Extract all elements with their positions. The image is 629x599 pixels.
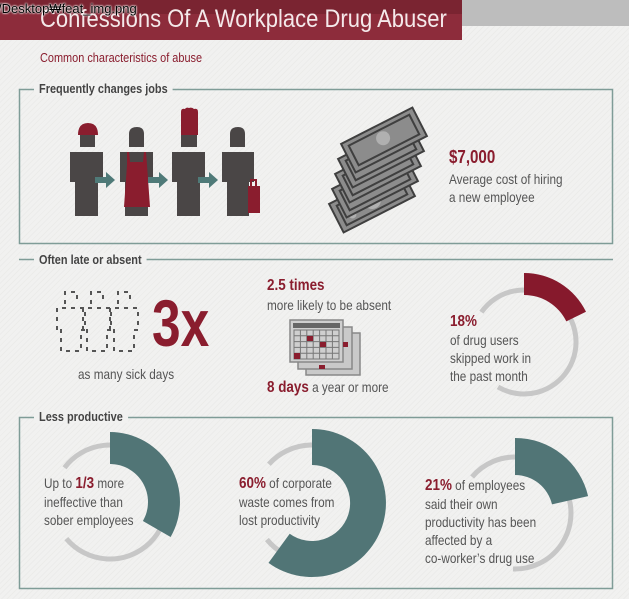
- text: hiring cost: Average cost of hiring: [449, 171, 563, 187]
- text: 60%: [239, 475, 334, 528]
- text: 18%: of drug users: [450, 332, 519, 348]
- figure 3 with chef hat: [172, 108, 205, 216]
- icon: dashed sick people: [57, 292, 138, 351]
- text: 21%: 21% of employees: [425, 477, 525, 494]
- chart: 21% donut: [472, 438, 588, 569]
- text: 60%: lost productivity: [239, 512, 320, 528]
- chart: 60% donut: [267, 429, 386, 577]
- text: hiring cost: a new employee: [449, 189, 535, 205]
- text: 21%: said their own: [425, 496, 498, 512]
- figure 4 with briefcase: [222, 127, 260, 216]
- chart: 18% donut: [481, 273, 586, 394]
- heading: frequently changes jobs: Frequently changes jobs: [39, 81, 168, 96]
- text: 21%: co-worker’s drug use: [425, 550, 534, 566]
- icon: money stack: [329, 108, 427, 232]
- stat: 3x: 3x: [152, 286, 209, 360]
- line: often late or absent: [19, 258, 613, 260]
- text: 18%: skipped work in: [450, 350, 531, 366]
- chart: 1/3 donut: [64, 432, 180, 559]
- subtitle: Common characteristics of abuse: [40, 50, 202, 65]
- arrows: [95, 172, 218, 188]
- figure 1 with hard hat: [70, 123, 103, 216]
- text: 21%: [425, 477, 536, 566]
- heading: often late or absent: Often late or absent: [39, 252, 142, 267]
- text: 60%: 60% of corporate: [239, 475, 332, 492]
- text: 21%: productivity has been: [425, 514, 536, 530]
- text: hiring cost: $7,000: [449, 147, 495, 167]
- text: 1/3: sober employees: [44, 512, 134, 528]
- box: less productive: [20, 418, 612, 588]
- text: 18%: 18%: [450, 313, 477, 330]
- text: 18%: the past month: [450, 368, 528, 384]
- file path overlay: /Desktop₩feat_img.png: [0, 1, 137, 16]
- text: hiring cost: [449, 147, 563, 205]
- top gray strip: [460, 0, 629, 26]
- text: 2.5 times: more likely to be absent: [267, 297, 391, 313]
- title banner: [0, 0, 462, 40]
- icon: calendar stack: [290, 320, 360, 375]
- text: 1/3: [44, 475, 134, 528]
- title: Confessions Of A Workplace Drug Abuser: [40, 5, 447, 33]
- text: 21%: affected by a: [425, 532, 492, 548]
- text: 2.5 times: 2.5 times: [267, 277, 325, 294]
- text: 60%: waste comes from: [239, 494, 334, 510]
- text: 18%: [450, 313, 531, 384]
- text: sick days: as many sick days: [78, 366, 174, 382]
- figure 2 with apron: [120, 127, 153, 216]
- icon: job changing figures: [70, 108, 260, 216]
- text: 1/3: Up to 1/3 more: [44, 475, 124, 492]
- box: frequently changes jobs: [20, 90, 612, 244]
- text: 8 days: 8 days a year or more: [267, 379, 389, 396]
- text: 2.5 times: [267, 277, 392, 313]
- heading: less productive: Less productive: [39, 409, 123, 424]
- text: 1/3: ineffective than: [44, 494, 123, 510]
